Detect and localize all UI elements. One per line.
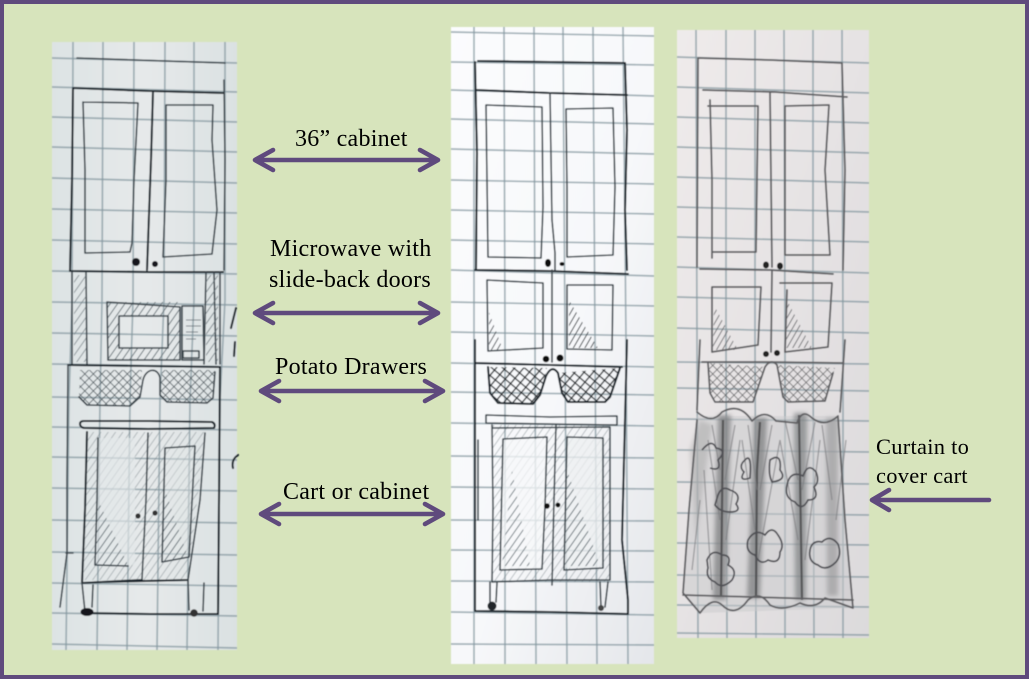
panel: left sketch with microwave and cart: [52, 42, 238, 650]
middle cabinet: [712, 270, 832, 357]
microwave: [72, 272, 220, 364]
upper cabinet: [475, 61, 628, 274]
panel: middle sketch with upper and lower cabinets: [451, 27, 654, 664]
potato drawers: [697, 340, 845, 412]
upper cabinet: [70, 58, 225, 272]
label: curtain to cover cart: cover cart: [876, 463, 968, 488]
label: microwave with slide-back doors: Microwave with: [270, 236, 431, 262]
cart: [475, 340, 628, 614]
potato drawers: [68, 365, 220, 406]
label: curtain to cover cart: Curtain to: [876, 434, 969, 459]
potato drawers: [475, 363, 622, 404]
arrow: pointing at curtain: [872, 490, 989, 510]
arrow: 36 inch cabinet span: [255, 150, 438, 170]
flower motifs: [702, 443, 840, 586]
upper cabinet: [697, 58, 847, 274]
label: 36 inch cabinet: 36” cabinet: [295, 126, 408, 152]
cart: [60, 365, 220, 617]
label: microwave with slide-back doors: slide-back doors: [269, 267, 431, 293]
panel: right sketch with curtain: [677, 30, 869, 638]
arrow: potato drawers span: [261, 381, 443, 401]
label: cart or cabinet: Cart or cabinet: [283, 479, 429, 505]
middle cabinet: [487, 270, 613, 362]
curtain: [683, 409, 853, 613]
label: potato drawers: Potato Drawers: [275, 354, 427, 380]
arrow: cart span: [261, 504, 443, 524]
arrow: microwave span: [255, 303, 438, 323]
